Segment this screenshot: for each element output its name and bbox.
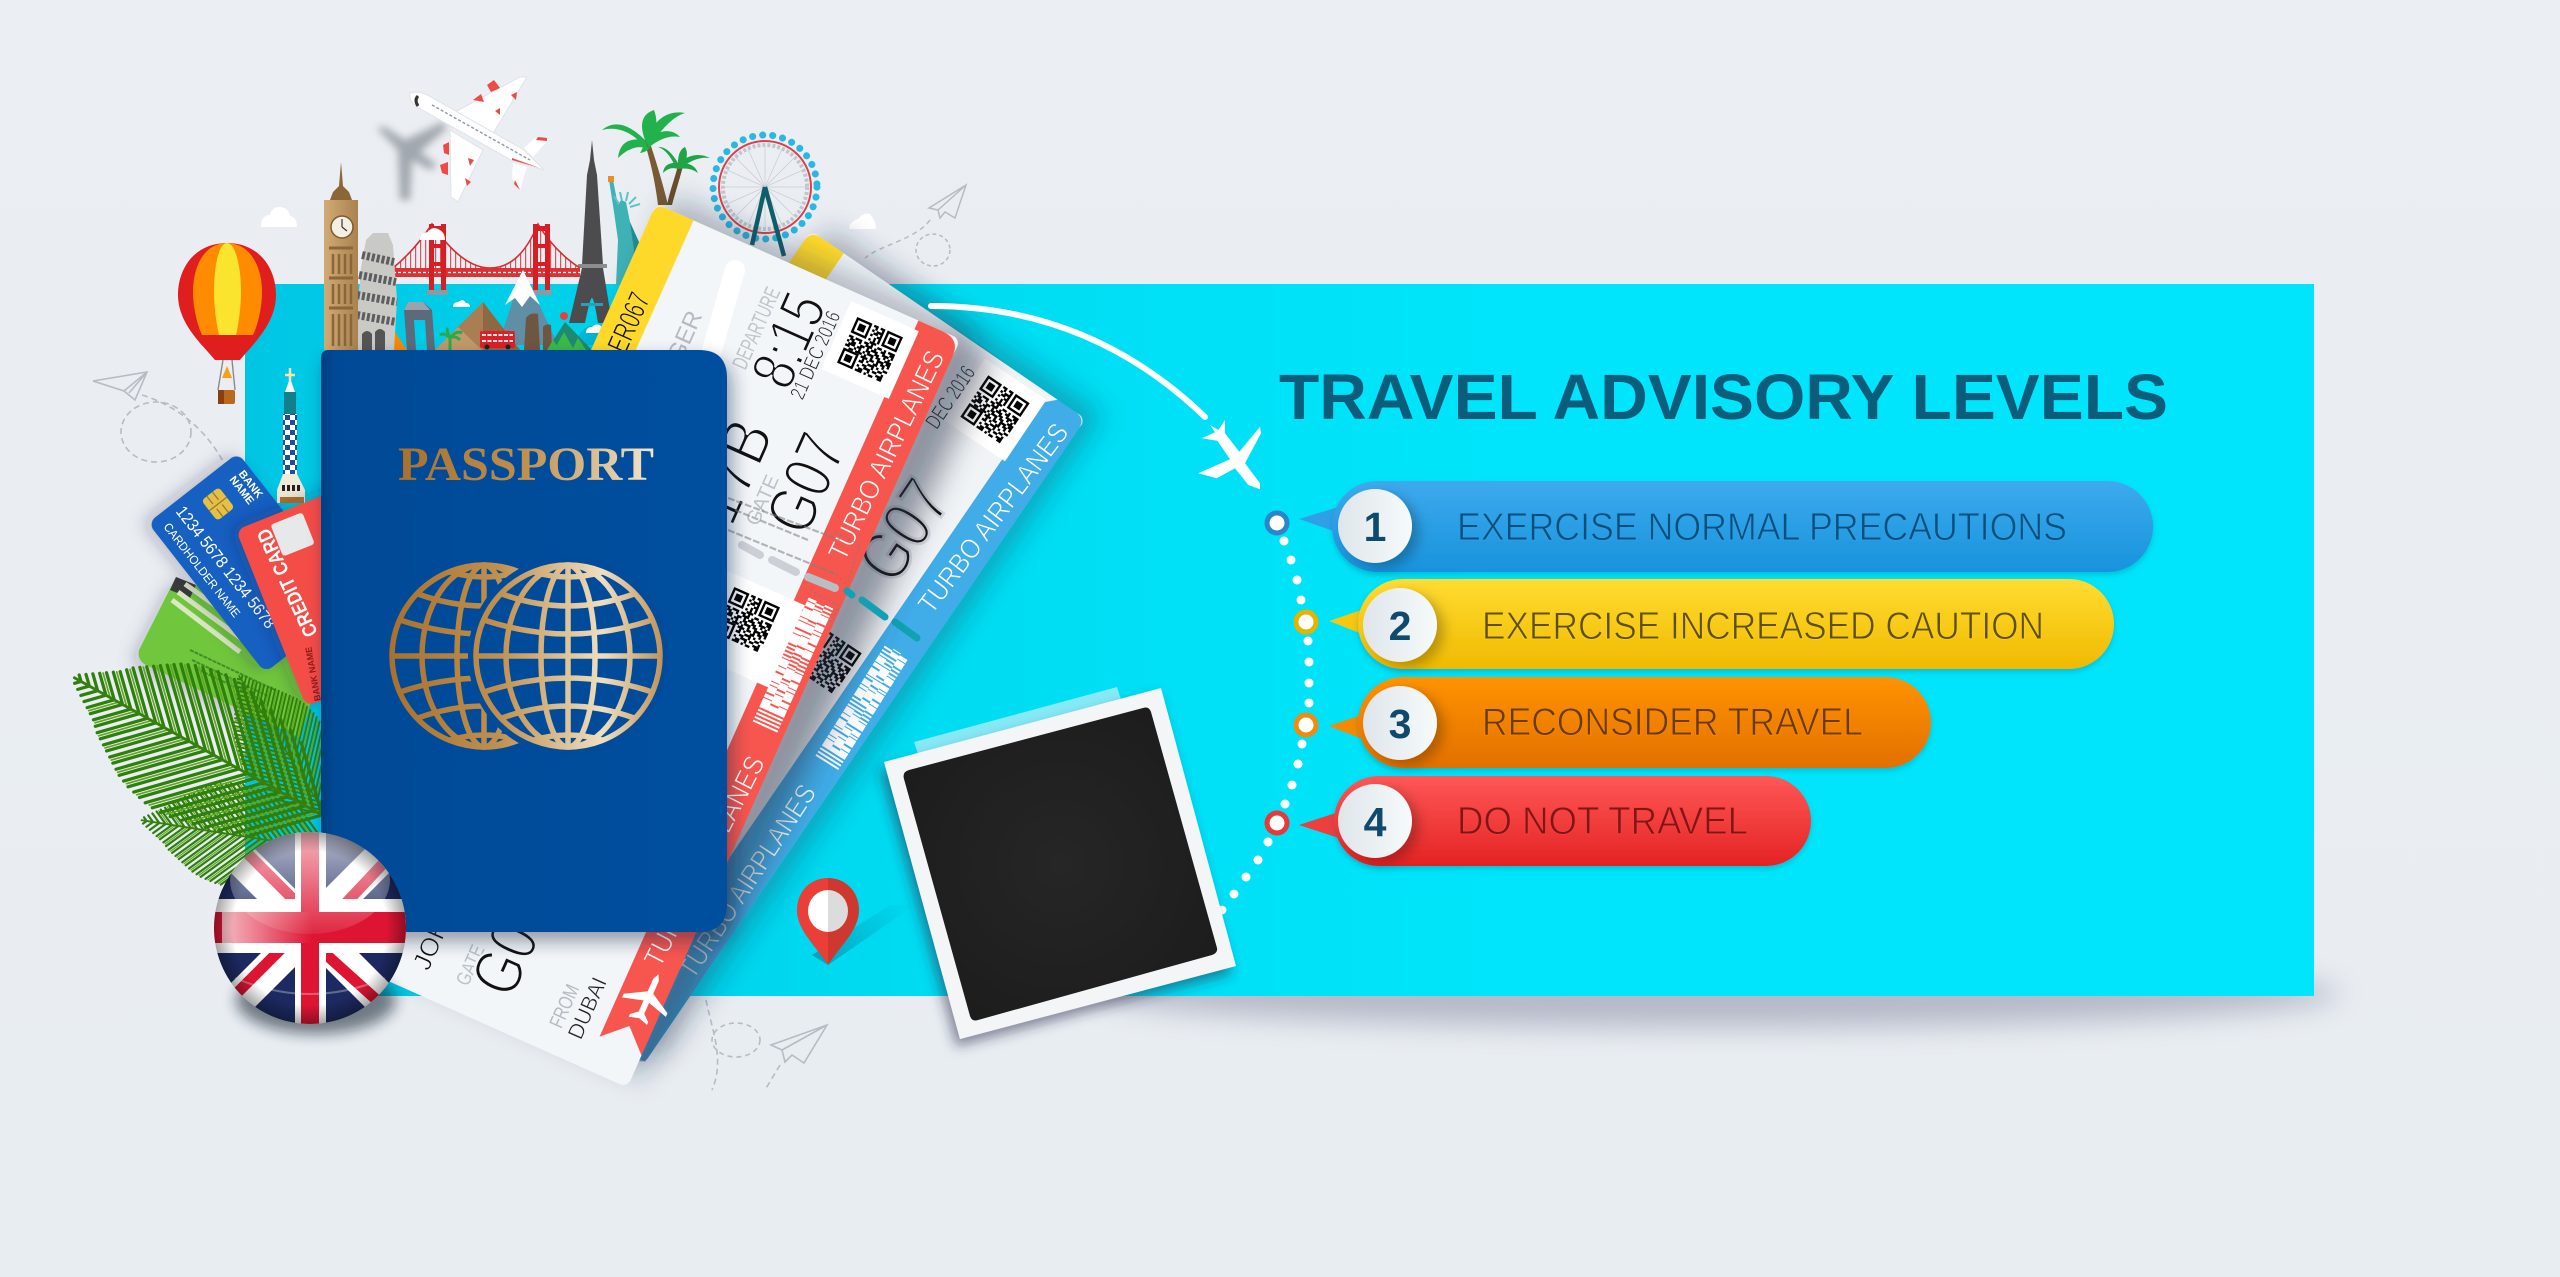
ticket front details [406,270,950,1043]
ticket front details: GATE [742,472,784,529]
credit card: red [236,488,412,707]
barcode on blue [819,646,905,768]
ticket front details: DEPARTURE [727,283,785,373]
ticket: front with yellow and red strip [323,204,960,1087]
level 2: 2 [1389,603,1411,649]
blue card chip [201,487,235,521]
white airplane icon [1198,420,1261,489]
stonehenge [404,302,435,350]
ticket front details: TURBO AIRPLANES [638,751,771,972]
shadow cast on back ticket [640,345,975,1092]
level 2 [1296,579,2114,669]
hot air balloon [178,243,276,404]
level 3 [1296,677,1931,768]
ticket front details: PASSENGER [623,307,708,453]
barcode on red [757,599,829,731]
qr code back bottom [793,626,861,694]
airplane shadow [377,122,447,200]
polaroid photo [884,687,1236,1039]
dotted route [1218,536,1314,914]
level 3: 3 [1389,701,1411,747]
ferris wheel [713,135,817,256]
blue card text: BANK [236,468,265,501]
red bus [480,331,515,350]
ticket front details: FROM [546,981,584,1031]
cloud left [261,207,297,227]
dashed paper plane left [93,372,236,490]
level 4: 4 [1364,799,1387,845]
passport globes emblem [392,556,668,756]
ticket front details: GATE [452,942,490,989]
ticket: back with blue strip [369,231,1086,1064]
qr code back top [944,359,1046,461]
level 2: EXERCISE INCREASED CAUTION [1482,605,2044,648]
flag shadow [236,966,396,1034]
lower stub text: JOHN [406,897,463,974]
qr code front bottom [692,571,805,688]
cloud right [849,214,876,229]
ticket back details: TURBO AIRPLANES [912,417,1075,619]
red card text [253,525,323,702]
level 4: DO NOT TRAVEL [1457,800,1748,843]
ticket front details: DUBAI [563,973,612,1043]
passport [321,350,727,932]
ticket back details: TURBO AIRPLANES [672,779,822,984]
level 4 [1267,776,1811,866]
plane on red strip [616,964,681,1031]
airplane [410,77,549,202]
tent [378,327,407,350]
palm trees [602,110,710,205]
ticket front details: G07 [456,885,566,1007]
mountain [498,270,558,345]
blue card text: CARDHOLDER NAME [161,520,243,620]
ticket front details: ER067 [602,288,657,358]
level 1: 1 [1364,504,1386,550]
blue card text: NAME [227,474,256,507]
ticket back details [672,359,1075,984]
credit card: blue [148,453,355,673]
gaudi tower [277,368,305,503]
small palm [440,328,462,350]
ticket front details: TURBO AIRPLANES [822,345,950,565]
red card text: BANK NAME [303,646,323,702]
statue of liberty [608,176,648,285]
ticket front details: 17B [676,408,788,535]
title: TRAVEL ADVISORY LEVELS [1279,361,2168,433]
flight path arc [931,306,1205,417]
ticket front details: 21 DEC 2016 [786,308,845,403]
union jack badge [210,826,410,1030]
pyramids [435,302,520,350]
panel: cyan background [245,284,2314,996]
ticket front details: 8:15 [738,283,840,398]
dashed paper plane top [865,185,966,266]
red card text: CREDIT CARD [253,525,323,640]
panel drop shadow [1100,960,2340,1028]
level 3: RECONSIDER TRAVEL [1482,701,1863,744]
pisa tower [357,233,397,350]
small clouds [420,228,607,333]
photo frame [884,688,1236,1039]
dashed paper plane bottom [706,1000,827,1090]
golden gate bridge [393,224,580,295]
blue card text: 1234 5678 1234 5678 [172,502,279,632]
palm leaf [38,611,363,901]
moai statues [524,314,552,350]
ticket back details: DEC 2016 [920,361,980,433]
stamp marks [728,498,860,622]
eiffel tower [569,140,612,345]
credit card: green [139,577,330,738]
ticket back details: G07 [842,465,965,596]
photo black area [904,708,1217,1020]
level 1: EXERCISE NORMAL PRECAUTIONS [1457,506,2067,549]
green hill and trees [547,312,592,350]
level 1 [1267,481,2153,572]
tape [914,687,1125,775]
big ben [324,162,358,350]
ticket front details: G07 [751,422,861,544]
passport title: PASSPORT [398,438,654,491]
qr code front top [821,301,919,399]
location pin [797,878,915,965]
blue card text [161,468,279,632]
